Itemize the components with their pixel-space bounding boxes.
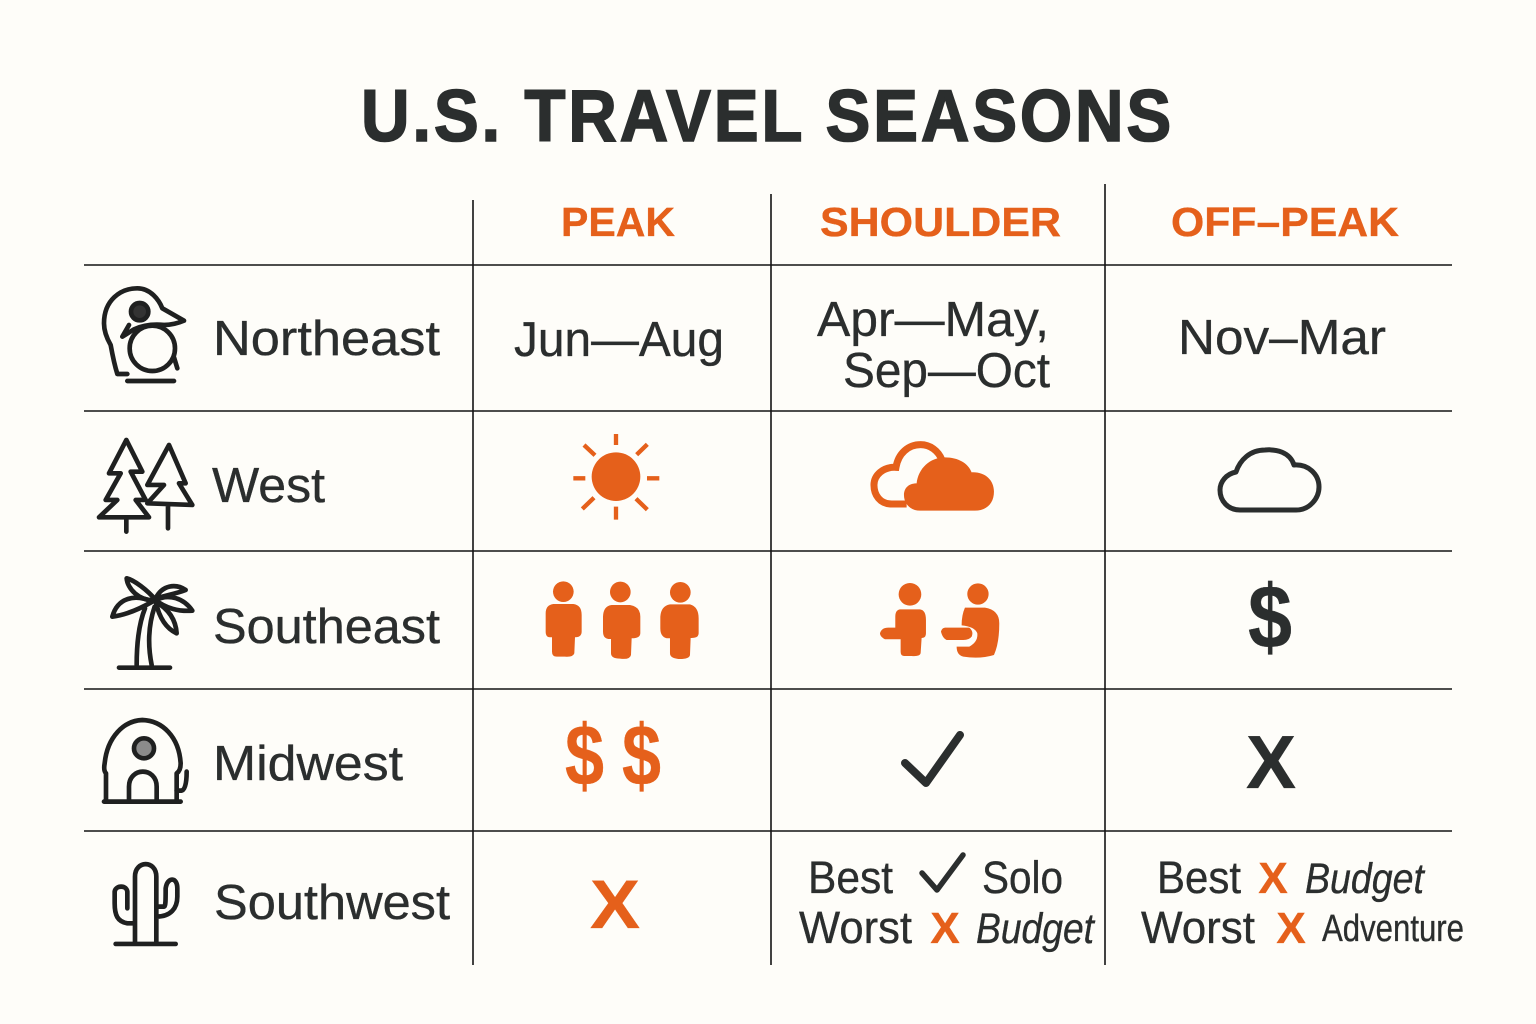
icon: penguin: [104, 288, 184, 381]
off-peak best and worst: X: [1258, 854, 1288, 903]
row: Southwest: [115, 852, 1464, 953]
shoulder months: Sep—Oct: [843, 344, 1050, 398]
off-peak best and worst: Budget: [1305, 855, 1426, 903]
shoulder months: Apr—May,: [817, 293, 1049, 347]
icon: sun: [573, 434, 659, 520]
row: West: [99, 434, 1319, 532]
icon: three people: [546, 581, 699, 659]
label: Southeast: Southeast: [213, 600, 440, 654]
icon: cloud outline: [1220, 450, 1319, 510]
label: Southwest: Southwest: [214, 876, 450, 930]
icon: pine trees: [99, 440, 192, 532]
shoulder best and worst: X: [930, 904, 960, 953]
icon: X mark: X: [1246, 720, 1296, 804]
title: U.S. TRAVEL SEASONS: [361, 76, 1174, 157]
icon: cloud with sun-cloud outline: [874, 445, 994, 511]
shoulder best and worst: [799, 852, 1096, 953]
shoulder best and worst: Solo: [982, 852, 1063, 903]
off-peak best and worst: Best: [1157, 852, 1241, 903]
icon: two people exchanging: [880, 583, 999, 658]
off-peak best and worst: Worst: [1141, 902, 1255, 953]
shoulder best and worst: Best: [808, 852, 893, 903]
row: Southeast: [112, 568, 1292, 668]
column headers: [561, 199, 1399, 245]
header: peak: PEAK: [561, 199, 675, 245]
off-peak best and worst: X: [1276, 904, 1306, 953]
icon: orange X: X: [590, 866, 640, 943]
off-peak best and worst: Adventure: [1322, 908, 1464, 950]
peak months: Jun—Aug: [514, 313, 724, 367]
icon: dollar sign: $: [1248, 568, 1292, 668]
header: shoulder: SHOULDER: [820, 199, 1061, 245]
header: off-peak: OFF–PEAK: [1171, 199, 1399, 245]
shoulder best and worst: Budget: [976, 905, 1096, 953]
off-peak best and worst: [1141, 852, 1464, 953]
shoulder months: [817, 293, 1050, 398]
icon: check mark: [905, 735, 960, 783]
icon: cactus: [115, 864, 177, 944]
icon: double dollar signs: $: [622, 708, 661, 804]
label: Northeast: Northeast: [213, 312, 440, 366]
label: Midwest: Midwest: [213, 737, 403, 791]
row: Midwest: [104, 708, 1296, 804]
label: West: West: [212, 459, 325, 513]
icon: barn: [104, 720, 187, 802]
icon: double dollar signs: $: [565, 708, 604, 804]
shoulder best and worst: Worst: [799, 902, 912, 953]
row: Northeast: [104, 288, 1386, 398]
off-peak months: Nov–Mar: [1178, 311, 1386, 365]
icon: double dollar signs: [565, 708, 661, 804]
icon: palm tree: [112, 578, 192, 668]
